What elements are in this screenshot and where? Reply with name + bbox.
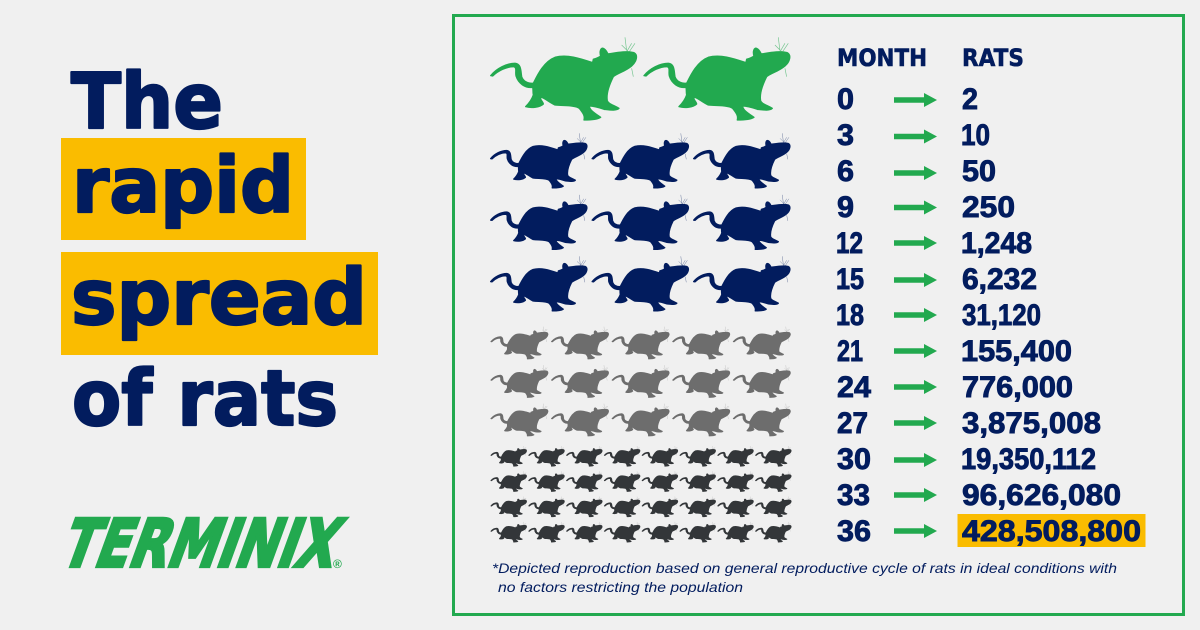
month column: 3 [837,119,854,152]
rats column: 3,875,008 [962,407,1101,440]
rats: gray rows [491,327,790,436]
month column: 33 [837,479,870,512]
footnote [492,560,1117,595]
footnote: no factors restricting the population [498,579,743,595]
title highlight: rapid [61,138,306,240]
rats column: 155,400 [961,335,1072,368]
rats column: 776,000 [962,371,1073,404]
month column: 6 [837,155,854,188]
arrows column [894,93,937,538]
rats column: 19,350,112 [961,443,1096,476]
month column: 0 [837,83,854,116]
rats column: 428,508,800 [962,515,1141,548]
title line: spread: spread [71,254,367,343]
month column [836,83,871,548]
rats column: 50 [962,155,996,188]
rats column [961,83,1141,548]
month column: 21 [837,335,863,368]
title line: The: The [71,58,223,147]
table: months to rats [836,44,1146,548]
rats column: 250 [962,191,1015,224]
month column: 30 [837,443,871,476]
month column: 18 [836,299,864,332]
month column: 12 [836,227,863,260]
rats: dark rows [491,446,791,542]
month column: 27 [837,407,868,440]
month column: 24 [837,371,871,404]
panel: rat reproduction [454,16,1184,614]
title line: of rats: of rats [72,355,338,444]
month column: 15 [836,263,864,296]
title highlight: spread [61,252,378,355]
rats column: 10 [961,119,990,152]
rats column: 96,626,080 [962,479,1121,512]
column heading: month: MONTH [837,44,927,72]
logo: Terminix: TERMINIX [52,506,353,583]
rats: month 0 green [491,37,790,120]
title line: rapid: rapid [72,142,294,231]
footnote: *Depicted reproduction based on general reproductive cycle of rats in ideal conditions with [492,560,1117,576]
rats column: 1,248 [961,227,1032,260]
rats column: 2 [962,83,978,116]
column heading: rats: RATS [962,44,1024,72]
rats column: 31,120 [962,299,1041,332]
logo: Terminix: ® [333,557,342,571]
rats column: 6,232 [962,263,1037,296]
month column: 9 [837,191,854,224]
month column: 36 [837,515,871,548]
title [61,58,378,444]
rats: navy rows [491,133,790,311]
highlight: final rat count [958,514,1146,547]
